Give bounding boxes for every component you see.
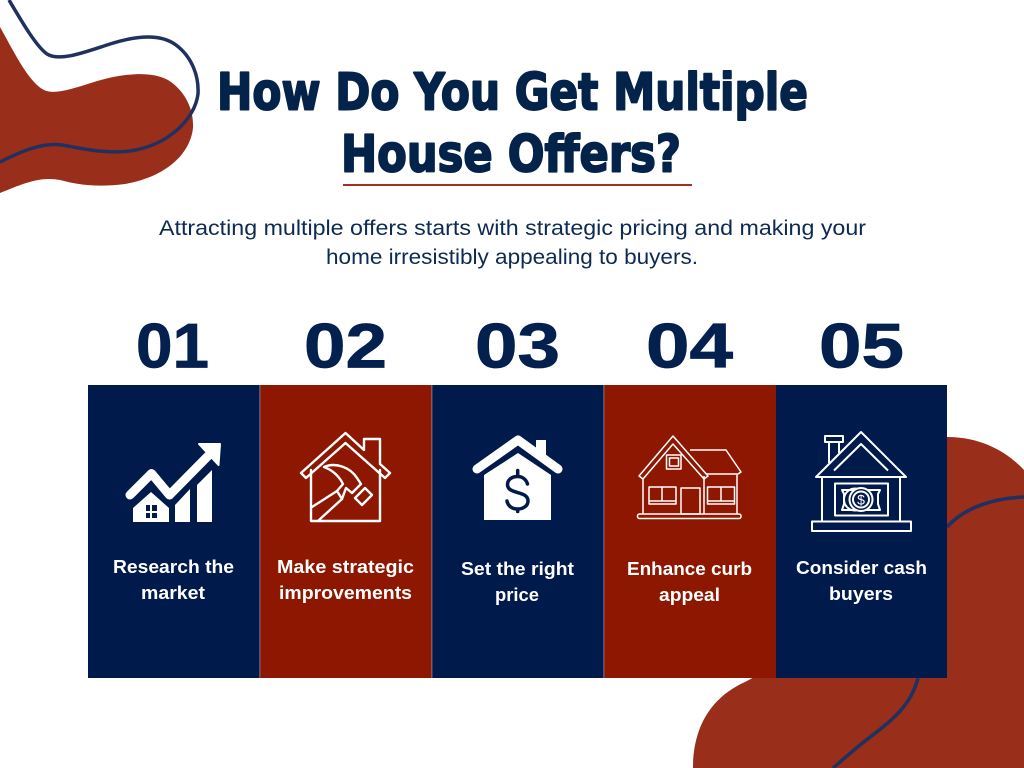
label: market [141,583,205,603]
icon: house with dollar sign [477,440,558,520]
step number 04: 04 [646,312,733,382]
step number 01: 01 [136,312,209,382]
icon: house with hammer [301,433,390,521]
decorative blob: bottom right [693,437,1024,768]
icon: house with cash: $ [857,492,865,508]
title: How Do You Get Multiple [217,64,808,122]
label: Set the right [461,559,574,579]
label [113,557,234,603]
label: Consider cash [796,558,927,578]
step number 05: 05 [819,312,904,382]
step number 02: 02 [304,312,387,382]
icon: house with cash [812,432,911,531]
label: appeal [659,585,720,605]
subtitle text: home irresistibly appealing to buyers. [326,246,698,269]
label [796,558,927,604]
title: House Offers? [341,126,681,184]
panel: research the market [88,385,260,678]
title underline [343,184,692,186]
label: Make strategic [277,557,414,577]
icon: outlined house [638,436,741,518]
label [627,559,752,605]
panel: make strategic improvements [260,385,432,678]
panel: consider cash buyers [776,385,947,678]
label: buyers [829,584,893,604]
label: Research the [113,557,234,577]
subtitle text: Attracting multiple offers starts with strategic pricing and making your [159,217,866,240]
panel dividers [260,385,604,678]
subtitle text [159,217,866,269]
label [461,559,574,605]
label [277,557,414,603]
panel: enhance curb appeal [604,385,776,678]
step number 03: 03 [475,312,560,382]
label: Enhance curb [627,559,752,579]
decorative blob: top left [0,0,198,193]
panel: set the right price [432,385,604,678]
label: price [495,585,539,605]
label: improvements [279,583,412,603]
title [217,64,808,184]
icon: house with rising chart [130,444,220,522]
